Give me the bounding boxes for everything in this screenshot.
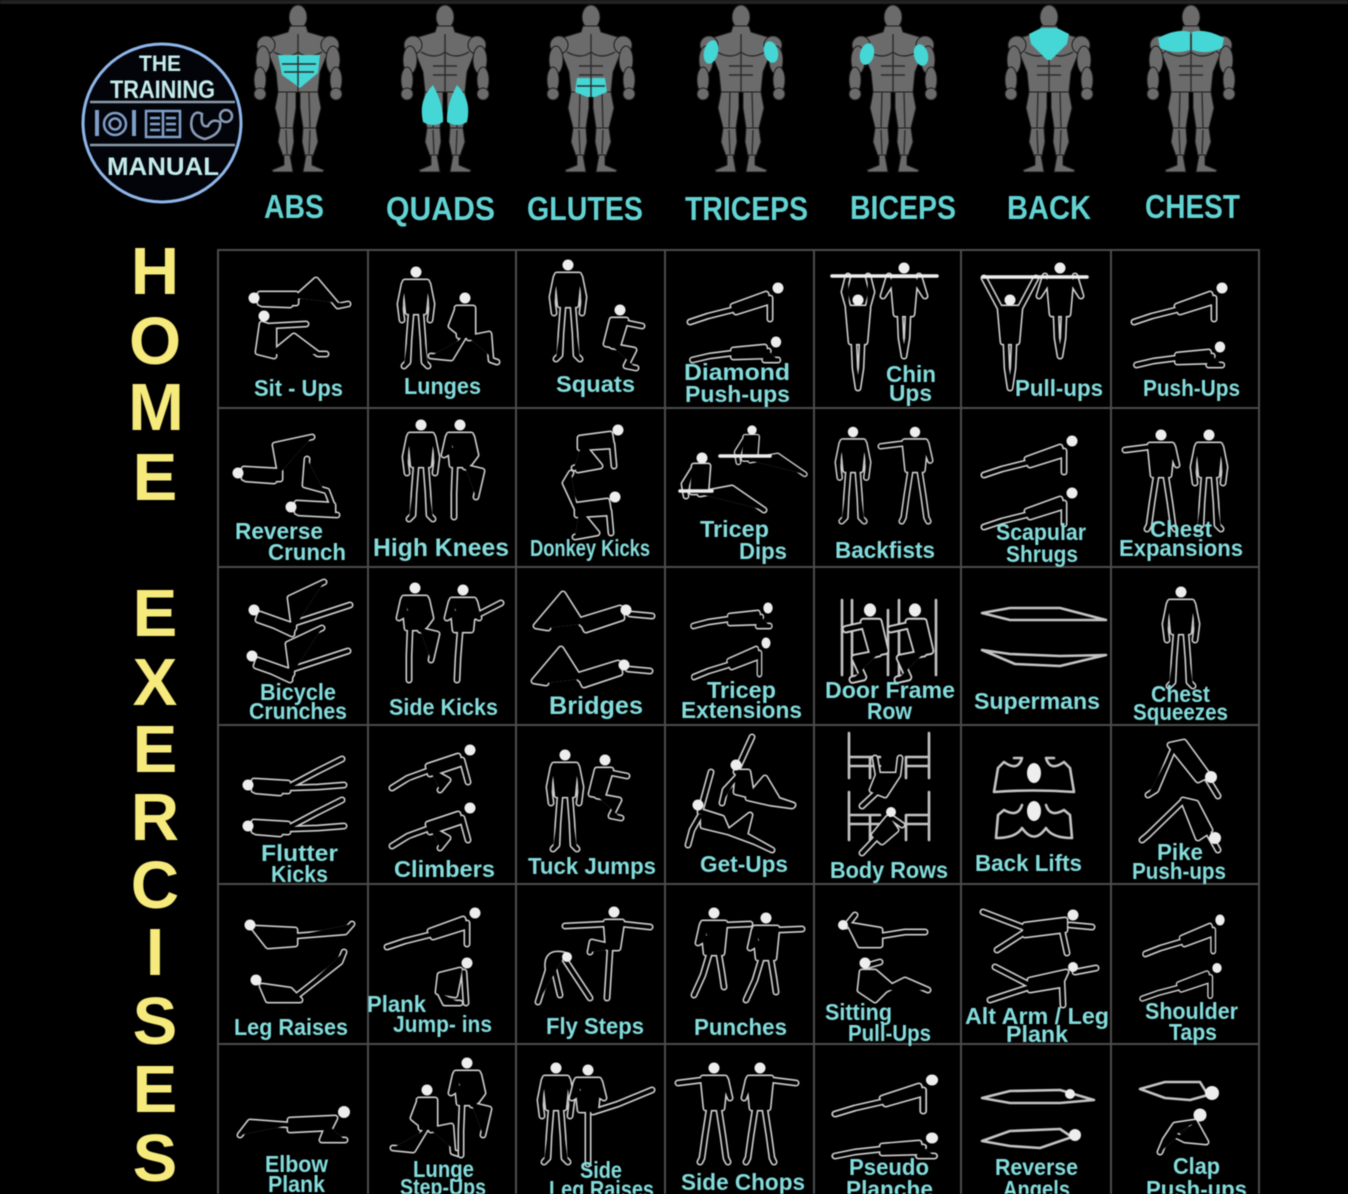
- exercise: Reverse Crunch: Crunch: [268, 539, 346, 565]
- exercise: Leg Raises: Leg Raises: [234, 1014, 348, 1040]
- exercise: Alt Arm / Leg Plank: [965, 910, 1109, 1047]
- exercise: Scapular Shrugs: Scapular: [996, 519, 1086, 545]
- exercise: Clap Push-ups: [1140, 1082, 1247, 1194]
- exercise: Tuck Jumps: [528, 750, 656, 879]
- vertical title: HOME EXERCISES: C: [131, 848, 179, 923]
- exercise: High Knees: [373, 420, 509, 562]
- exercise: Door Frame Row: [825, 600, 955, 724]
- muscle group headings: ABS: [264, 188, 324, 225]
- exercise: Fly Steps: [538, 906, 650, 1039]
- icon: book: [146, 111, 180, 137]
- muscle figure: abs: [254, 5, 342, 172]
- exercise: Lunges: [400, 266, 497, 399]
- exercise: Donkey Kicks: Donkey Kicks: [530, 535, 650, 561]
- icon: flexed arm: [191, 110, 232, 139]
- exercise: Climbers: [392, 744, 495, 882]
- muscle figure: triceps: [697, 5, 785, 172]
- exercise: Flutter Kicks: [242, 759, 344, 887]
- logo: The Training Manual: MANUAL: [107, 153, 219, 181]
- exercise: Chest Squeezes: Squeezes: [1133, 699, 1228, 725]
- vertical title: HOME EXERCISES: E: [133, 1052, 177, 1127]
- exercise: Punches: Punches: [694, 1014, 787, 1040]
- exercise: Reverse Angels: [982, 1089, 1094, 1194]
- logo: The Training Manual: [83, 44, 241, 202]
- vertical title: HOME EXERCISES: H: [131, 234, 179, 309]
- exercise: Body Rows: Body Rows: [830, 857, 948, 883]
- exercise: Tricep Dips: Dips: [739, 538, 787, 564]
- exercise: Alt Arm / Leg Plank: Plank: [1006, 1021, 1068, 1047]
- muscle figure: biceps: [849, 5, 937, 172]
- exercise: Push-Ups: [1134, 282, 1240, 401]
- exercise: Side Kicks: [389, 582, 501, 720]
- exercise: Supermans: [974, 608, 1106, 714]
- exercise: Back Lifts: Back Lifts: [975, 850, 1082, 876]
- exercise: Side Chops: [678, 1062, 805, 1194]
- exercise: Chin Ups: [832, 262, 937, 406]
- exercise: Chest Expansions: Chest: [1150, 516, 1212, 542]
- muscle figure: chest: [1147, 5, 1235, 172]
- exercise: Chin Ups: Ups: [889, 380, 932, 406]
- exercise: Chest Expansions: [1119, 430, 1243, 561]
- exercise: Pike Push-ups: Push-ups: [1132, 858, 1226, 884]
- exercise: Get-Ups: Get-Ups: [700, 851, 788, 877]
- vertical title: HOME EXERCISES: E: [133, 440, 177, 515]
- muscle group headings: TRICEPS: [685, 190, 808, 227]
- exercise: Fly Steps: Fly Steps: [546, 1013, 644, 1039]
- exercise: Lunge Step-Ups: Lunge: [413, 1156, 474, 1182]
- exercise: Pseudo Planche: Pseudo: [849, 1154, 929, 1180]
- exercise: Pike Push-ups: Pike: [1157, 839, 1203, 865]
- exercise: Sit-Ups: Sit - Ups: [254, 375, 343, 401]
- exercise: Scapular Shrugs: [984, 436, 1086, 567]
- exercise: Chest Expansions: Expansions: [1119, 535, 1243, 561]
- exercise table grid: [218, 250, 1259, 1194]
- exercise: Bicycle Crunches: [246, 582, 350, 724]
- logo: The Training Manual: TRAINING: [110, 76, 215, 104]
- exercise: Diamond Push-ups: [684, 282, 790, 407]
- exercise: Tricep Extensions: [681, 602, 802, 723]
- exercise: Get-Ups: [688, 737, 793, 877]
- exercise: Reverse Crunch: Reverse: [235, 518, 323, 544]
- exercise: Lunges: Lunges: [404, 373, 481, 399]
- exercise: Sitting Pull-Ups: [825, 915, 931, 1046]
- exercise: Pike Push-ups: [1132, 742, 1226, 884]
- muscle figure: back: [1005, 5, 1093, 172]
- exercise: Sit-Ups: [248, 280, 348, 401]
- vertical title: HOME EXERCISES: E: [133, 712, 177, 787]
- vertical title: HOME EXERCISES: X: [133, 645, 178, 720]
- vertical title: HOME EXERCISES: R: [131, 780, 179, 855]
- exercise: Diamond Push-ups: Diamond: [684, 359, 790, 385]
- exercise: Scapular Shrugs: Shrugs: [1006, 541, 1078, 567]
- vertical title: HOME EXERCISES: S: [133, 1121, 177, 1194]
- exercise: Chin Ups: Chin: [886, 361, 936, 387]
- exercise: Tricep Extensions: Extensions: [681, 697, 802, 723]
- muscle figure: quads: [401, 5, 489, 172]
- vertical title: HOME EXERCISES: S: [133, 984, 177, 1059]
- exercise: Side Kicks: Side Kicks: [389, 694, 498, 720]
- exercise: Flutter Kicks: Kicks: [271, 861, 328, 887]
- logo: The Training Manual: THE: [139, 51, 181, 76]
- exercise: Reverse Angels: Reverse: [995, 1154, 1078, 1180]
- vertical title: HOME EXERCISES: [128, 234, 184, 1194]
- exercise: Bicycle Crunches: Bicycle: [260, 679, 336, 705]
- exercise: Flutter Kicks: Flutter: [261, 840, 338, 866]
- exercise: Pull-ups: [983, 262, 1103, 401]
- exercise: Reverse Crunch: [232, 437, 346, 565]
- exercise: Door Frame Row: Row: [867, 698, 912, 724]
- exercise: Shoulder Taps: [1142, 914, 1238, 1045]
- exercise: Supermans: Supermans: [974, 688, 1100, 714]
- exercise: Backfists: Backfists: [835, 537, 935, 563]
- muscle figure: glutes: [547, 5, 635, 172]
- exercise: Shoulder Taps: Shoulder: [1145, 998, 1238, 1024]
- exercise: Donkey Kicks: [530, 424, 650, 561]
- exercise: Sitting Pull-Ups: Sitting: [825, 999, 892, 1025]
- vertical title: HOME EXERCISES: M: [128, 370, 184, 445]
- vertical title: HOME EXERCISES: O: [129, 304, 181, 379]
- muscle group headings: BACK: [1007, 189, 1091, 226]
- exercise: Plank Jump-ins: [367, 908, 492, 1037]
- icon: plate and cutlery: [97, 110, 134, 136]
- exercise: Climbers: Climbers: [394, 856, 495, 882]
- exercise: Punches: [694, 908, 802, 1040]
- exercise: Clap Push-ups: Clap: [1173, 1153, 1220, 1179]
- muscle group headings: QUADS: [386, 190, 495, 227]
- exercise: Sitting Pull-Ups: Pull-Ups: [848, 1020, 931, 1046]
- exercise: Push-Ups: Push-Ups: [1143, 375, 1240, 401]
- exercise: Side Leg Raises: [540, 1062, 654, 1194]
- exercise: Chest Squeezes: Chest: [1151, 681, 1210, 707]
- exercise: Leg Raises: [234, 920, 352, 1040]
- exercise: High Knees: High Knees: [373, 534, 509, 562]
- exercise: Back Lifts: [975, 758, 1082, 876]
- exercise: Plank Jump-ins: Jump- ins: [393, 1011, 492, 1037]
- muscle group headings: [264, 188, 1240, 227]
- exercise: Bridges: Bridges: [549, 692, 643, 720]
- exercise: Tricep Extensions: Tricep: [707, 677, 776, 703]
- exercise: Body Rows: [830, 733, 948, 883]
- exercise: Shoulder Taps: Taps: [1169, 1019, 1217, 1045]
- muscle group headings: GLUTES: [527, 190, 643, 227]
- muscle figures header: [254, 5, 1235, 172]
- exercise: Squats: [552, 260, 642, 397]
- vertical title: HOME EXERCISES: E: [133, 576, 177, 651]
- exercise: Plank Jump-ins: Plank: [367, 991, 426, 1017]
- exercise: Lunge Step-Ups: [393, 1058, 489, 1194]
- exercise: Bridges: [534, 594, 652, 720]
- exercise: Door Frame Row: Door Frame: [825, 677, 955, 703]
- exercise: Tricep Dips: Tricep: [700, 516, 769, 542]
- exercise: Chest Squeezes: [1133, 586, 1228, 725]
- exercise: Squats: Squats: [556, 371, 635, 397]
- exercise: Elbow Plank: Elbow: [265, 1151, 328, 1177]
- exercise: Bicycle Crunches: Crunches: [249, 698, 347, 724]
- vertical title: HOME EXERCISES: I: [146, 915, 164, 990]
- exercise: Pull-ups: Pull-ups: [1015, 375, 1103, 401]
- exercise: Elbow Plank: [240, 1106, 350, 1194]
- exercise: Side Leg Raises: Side: [580, 1157, 622, 1183]
- exercise: Backfists: [835, 427, 935, 563]
- muscle group headings: BICEPS: [850, 189, 956, 226]
- exercise: Tuck Jumps: Tuck Jumps: [528, 853, 656, 879]
- muscle group headings: CHEST: [1145, 188, 1240, 225]
- exercise: Pseudo Planche: [835, 1074, 938, 1194]
- exercise: Tricep Dips: [680, 425, 805, 564]
- exercise: Diamond Push-ups: Push-ups: [685, 381, 790, 407]
- exercise: Alt Arm / Leg Plank: Alt Arm / Leg: [965, 1003, 1109, 1029]
